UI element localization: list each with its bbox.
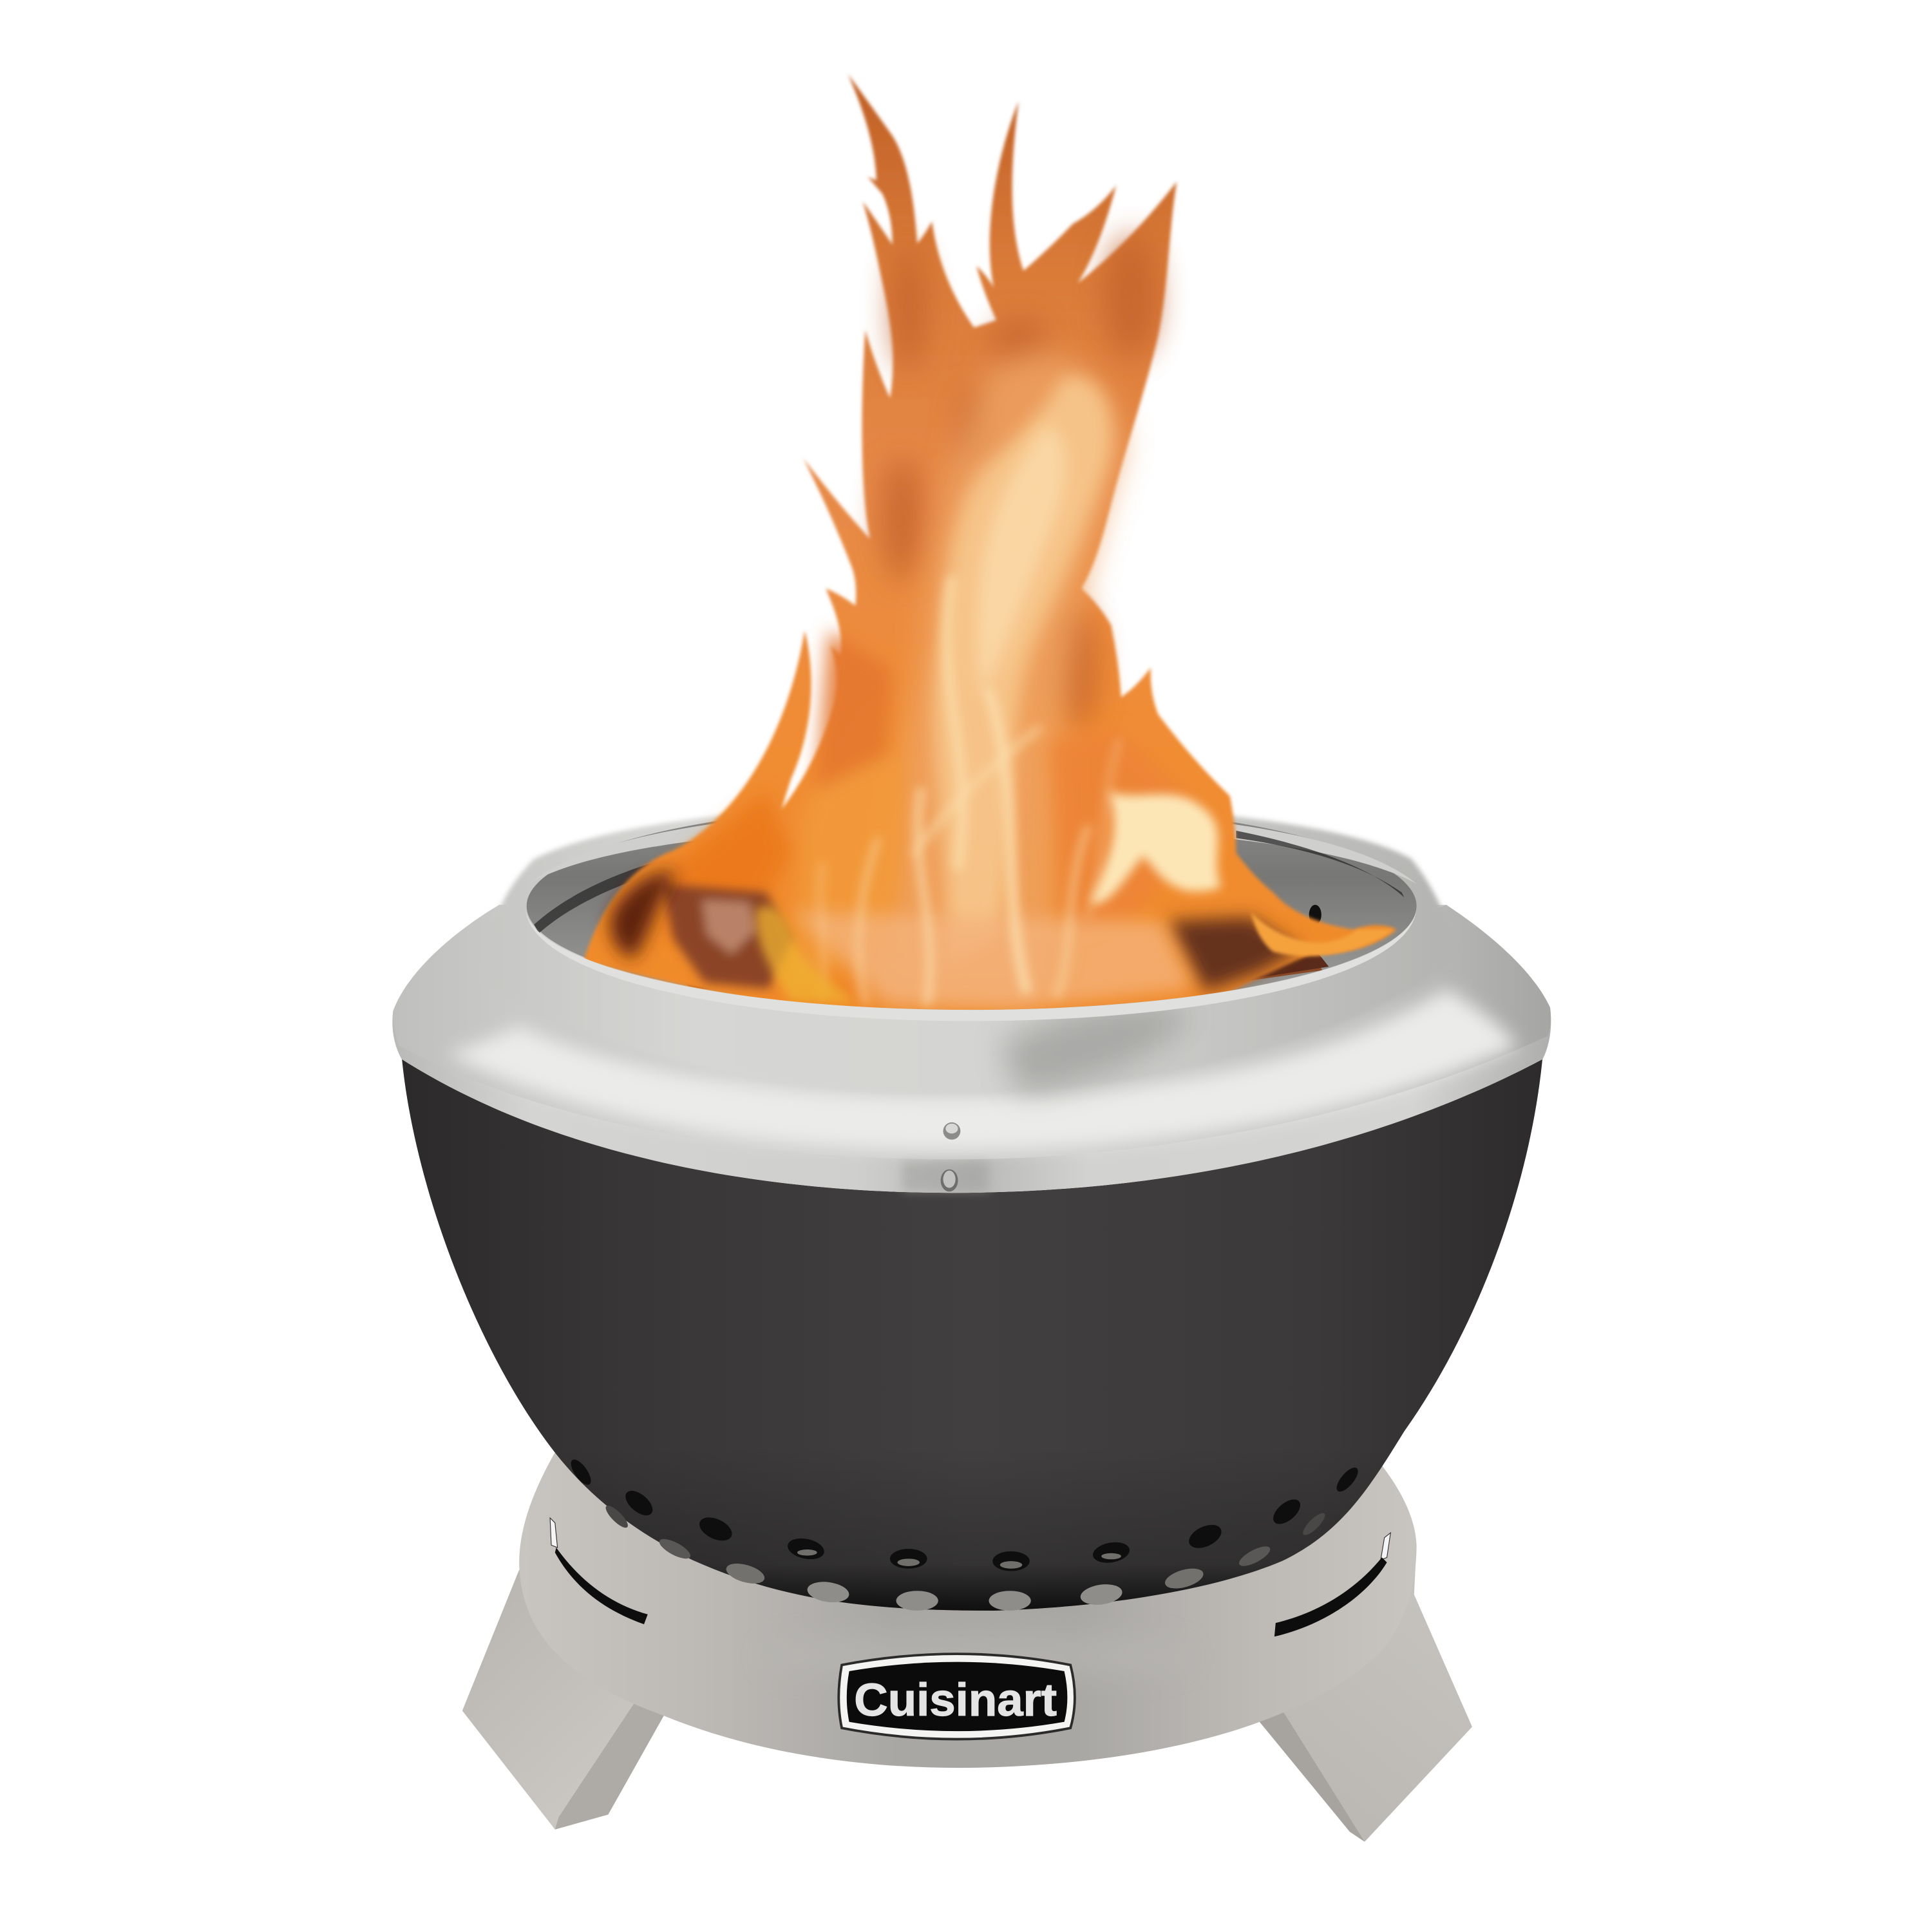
- screw: lower: [902, 1162, 989, 1191]
- upper row of holes: [567, 1457, 1361, 1571]
- logs: [687, 954, 1329, 1010]
- mid orange glow: [866, 351, 1125, 1001]
- left charred flame: [611, 871, 677, 959]
- bowl: black body: [371, 1057, 1582, 1619]
- flames: [583, 74, 1397, 1014]
- flange outer band: [392, 905, 1551, 1193]
- pale flame core: [934, 376, 1112, 964]
- left vent slot: [550, 1518, 648, 1624]
- bright flange band: [448, 989, 1518, 1150]
- base ring: [519, 1452, 1417, 1768]
- log visible through flame: [661, 884, 791, 989]
- yellow flame lick: [756, 906, 853, 1004]
- right leg: [1260, 1545, 1472, 1842]
- neck collar: [483, 804, 1455, 1094]
- base ring and legs: [462, 1452, 1472, 1842]
- translucent log banding: [791, 913, 1193, 1009]
- left leg: [462, 1570, 664, 1830]
- opening: interior wall: [527, 802, 1417, 1010]
- opening: lit back lip: [529, 808, 1417, 884]
- flame tail at right: [1251, 913, 1394, 956]
- right log: [1150, 913, 1329, 989]
- base highlight: [766, 1634, 1187, 1679]
- dark orange upper tones: [880, 235, 1158, 729]
- rim: steel flange and neck: [392, 802, 1551, 1193]
- left log: [687, 984, 710, 989]
- right log through flame: [1168, 917, 1300, 991]
- right vent slot: [1274, 1533, 1390, 1636]
- neck shadow patch: [1001, 1005, 1193, 1093]
- logo text: Cuisinart: [854, 1675, 1057, 1726]
- lower row of holes: [603, 1502, 1328, 1611]
- product illustration: fire pit with flames: [392, 73, 1551, 1842]
- rim front lip: covers flame base: [526, 906, 1417, 1021]
- bright right flame: [1090, 791, 1221, 904]
- flame silhouette: [583, 74, 1397, 1014]
- lower flame orange body: [667, 630, 1205, 989]
- glints inside upper holes: [797, 1549, 1121, 1569]
- main log: [971, 968, 1323, 1010]
- screw: upper: [943, 1122, 960, 1140]
- interior vent hole: [1309, 905, 1321, 925]
- interior dark ledge: [534, 831, 1404, 933]
- bowl air holes: [567, 1457, 1361, 1611]
- badge: Cuisinart logo plate: [838, 1654, 1075, 1739]
- streaks of light: [820, 581, 1119, 1001]
- flange shoulder: [393, 905, 1551, 1159]
